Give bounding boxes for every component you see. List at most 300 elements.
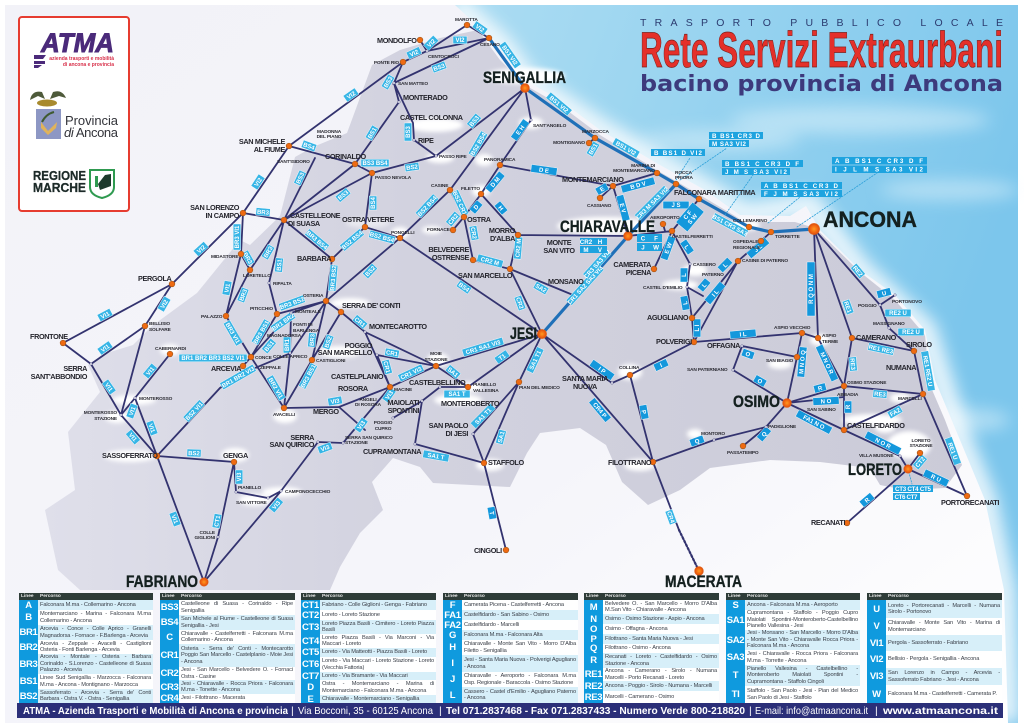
footer bar: | bbox=[291, 705, 294, 717]
town names: IN CAMPO bbox=[206, 211, 240, 220]
route label chips: BS3 BS4 bbox=[362, 161, 388, 167]
small place names: ANGELI bbox=[359, 397, 377, 403]
legend column 5: Osimo - Offagna - Ancona bbox=[605, 626, 668, 632]
town names: RIPE bbox=[418, 136, 434, 145]
route label chips: L bbox=[701, 282, 709, 289]
small place names: AVACELLI bbox=[273, 412, 296, 418]
route label chips: BR1 BR2 bbox=[271, 313, 296, 333]
route label chips: BS2 BS4 bbox=[470, 132, 488, 157]
town names: ROSORA bbox=[338, 384, 369, 393]
logo: Provincia di Ancona bbox=[30, 91, 119, 140]
regular routes bbox=[63, 25, 967, 582]
town names: GENGA bbox=[223, 451, 249, 460]
logo panel bbox=[19, 17, 129, 211]
small place names: CABERNARDI bbox=[155, 346, 187, 352]
legend column 1: Arcevia - Conce - Colle Aprico - Granelli Magnadorsa - Fornace - F.Barlenga - Arcevia bbox=[40, 626, 151, 638]
route label chips: SA1 bbox=[446, 367, 459, 379]
town names: SANT'ABBONDIO bbox=[31, 372, 88, 381]
town names: CASTELLEONE bbox=[290, 211, 341, 220]
box: Marina di Montemarciano: B BS1 CR3 D bbox=[712, 133, 761, 140]
route label chips: CR1 bbox=[381, 361, 390, 375]
route label chips: U bbox=[881, 291, 887, 298]
town names: SAN LORENZO bbox=[190, 203, 240, 212]
route label chips: C F bbox=[683, 210, 694, 221]
small place names: PIANELLO bbox=[473, 382, 497, 388]
legend column 5: Belvedere O. - San Marcello - Morro D'Alba M.San Vito - Chiaravalle - Ancona bbox=[605, 600, 717, 613]
town names: SAN MARCELLO bbox=[318, 348, 373, 357]
route label chips: R Q O N M bbox=[809, 274, 815, 304]
thick trunk routes bbox=[489, 38, 814, 334]
small place names: MADONNA bbox=[317, 129, 342, 135]
box: Ancona: I J L M S SA3 VI2 bbox=[835, 166, 924, 174]
small place names: PALAZZO bbox=[201, 314, 223, 320]
route label chips: VI3 bbox=[320, 445, 331, 453]
small place names: CENTOCROCI bbox=[428, 54, 460, 60]
footer bar: Via Bocconi, 35 - 60125 Ancona bbox=[298, 705, 433, 717]
small place names: MONTEROSSO bbox=[84, 410, 117, 416]
town names: POLVERIGI bbox=[656, 337, 692, 346]
town names: CINGOLI bbox=[474, 546, 502, 555]
route label chips: L bbox=[683, 244, 690, 251]
town names: BARBARA bbox=[297, 254, 332, 263]
overline: TRASPORTO PUBBLICO LOCALE bbox=[640, 17, 1003, 29]
route label chips: VI2 bbox=[474, 24, 485, 34]
legend column 1: B bbox=[25, 612, 32, 623]
town names: SPONTINI bbox=[388, 406, 419, 415]
route label chips: BS1 CR3 SA3 bbox=[711, 214, 749, 238]
small place names: RIPALTA bbox=[273, 281, 292, 287]
legend column 3: Loreto - Via Bramante - Via Maccari bbox=[322, 673, 408, 679]
route label chips: VI3 bbox=[237, 472, 243, 482]
legend column 1 bbox=[19, 593, 153, 703]
small place names: MACINE bbox=[394, 387, 413, 393]
route label chips: BS3 bbox=[406, 126, 412, 138]
route label chips: CR1 bbox=[385, 350, 399, 358]
route label chips: Q bbox=[694, 438, 701, 446]
town names: SAN MICHELE bbox=[239, 137, 286, 146]
small place names: CASSIANO bbox=[587, 203, 612, 209]
legend column 6: Jesi - Chiaravalle - Rocca Priora - Falconara M.ma - Torrette - Ancona bbox=[747, 651, 858, 664]
town names: OSTRENSE bbox=[432, 253, 470, 262]
route label chips: S W bbox=[687, 213, 699, 226]
route label chips: VI1 bbox=[100, 344, 112, 354]
legend column 7: Linee bbox=[869, 594, 882, 599]
small place names: MONTEALE bbox=[295, 309, 322, 315]
route label chips: BS2 VI1 bbox=[185, 401, 205, 422]
legend column 6: TI bbox=[732, 689, 739, 700]
town names: SAN VITO bbox=[543, 246, 575, 255]
route label chips: VI1 bbox=[127, 432, 138, 444]
major town names: OSIMO bbox=[733, 393, 780, 411]
small place names bbox=[84, 17, 933, 541]
town names: RECANATI bbox=[811, 518, 845, 527]
legend column 3: CT3 bbox=[302, 622, 319, 632]
route label chips: D E bbox=[538, 168, 549, 175]
legend column 2: Linee bbox=[162, 594, 175, 599]
logo: ATMA: ATMA bbox=[40, 28, 114, 58]
box: Ancona bbox=[832, 157, 927, 174]
small place names: OSIMO STAZIONE bbox=[847, 380, 887, 386]
legend column 1: Montemarciano - Marina - Falconara M.ma Collemarino - Ancona bbox=[40, 611, 151, 624]
logo: Regione Marche: MARCHE bbox=[33, 180, 86, 195]
route label chips: L bbox=[682, 273, 688, 277]
route label chips: CT2 bbox=[915, 456, 927, 469]
route label chips: BS3 bbox=[337, 189, 351, 202]
route label chips: R U bbox=[930, 474, 941, 484]
footer bar: Tel 071.2837468 - Fax 071.2837433 - Numero Verde 800-218820 bbox=[446, 705, 745, 717]
town names: MERGO bbox=[313, 407, 339, 416]
legend column 1: Falconara M.ma - Collemarino - Ancona bbox=[40, 602, 136, 608]
legend column 5: Osimo - Osimo Stazione - Aspio - Ancona bbox=[605, 616, 705, 622]
legend column 7 bbox=[867, 593, 1002, 703]
small place names: SOLFARE bbox=[149, 327, 172, 333]
route label chips: VI1 bbox=[147, 423, 155, 434]
route label chips: T bbox=[488, 511, 494, 516]
route label chips: E V bbox=[618, 203, 626, 214]
town names: AL FIUME bbox=[254, 145, 285, 154]
route label chips: BS4 bbox=[457, 282, 470, 294]
route label chips: CR1 bbox=[353, 317, 366, 329]
town names: MONTE bbox=[547, 238, 572, 247]
legend column 7: V bbox=[873, 621, 880, 632]
town names: SIROLO bbox=[906, 340, 932, 349]
small place names: CONCE bbox=[255, 355, 273, 361]
small place names: ROCCA bbox=[675, 170, 693, 176]
small place names: DI ROSORA bbox=[355, 402, 382, 408]
legend column 2: BS4 bbox=[161, 617, 178, 628]
route label chips: M N O R bbox=[818, 352, 834, 376]
legend column 4: L bbox=[450, 690, 455, 700]
legend column 2 bbox=[160, 593, 295, 703]
route label chips: BR3 BS2 bbox=[330, 265, 338, 291]
major town names bbox=[126, 69, 917, 591]
town names bbox=[30, 36, 999, 555]
small place names: VALLESINA bbox=[473, 388, 499, 394]
route label chips: O bbox=[756, 378, 763, 386]
small place names: PADIGLIONE bbox=[768, 424, 797, 430]
small place names: PASSO NEVOLA bbox=[375, 175, 412, 181]
route label chips: VI2 bbox=[254, 177, 264, 188]
small place names: ASPIO bbox=[822, 333, 837, 339]
small place names: PONGELLI bbox=[391, 230, 415, 236]
route label chips: L I bbox=[695, 324, 701, 331]
route label chips: CR4 bbox=[665, 511, 675, 525]
town names: DI SUASA bbox=[288, 219, 321, 228]
route label chips: VI1 bbox=[170, 514, 178, 525]
town names: SAN MARCELLO bbox=[458, 271, 513, 280]
legend column 2: Jesi - Filottrano - Macerata bbox=[181, 695, 245, 701]
legend column 5 bbox=[584, 593, 719, 703]
route label chips: BR3 bbox=[310, 333, 317, 346]
route label chips: CR2 bbox=[469, 227, 477, 240]
route label chips: BS4 bbox=[371, 197, 377, 209]
legend column 1: BR1 bbox=[19, 627, 38, 638]
route label chips: RE2 bbox=[851, 265, 864, 279]
logo: ATMA bbox=[34, 28, 114, 68]
route label chips: R bbox=[864, 497, 872, 505]
town names: PICENA bbox=[626, 268, 652, 277]
box: Chiaravalle CR2 H M V: H bbox=[598, 239, 603, 246]
legend column 5: Recanati - Loreto - Castelfidardo - Osimo Stazione - Ancona bbox=[605, 654, 717, 666]
box: Chiaravalle C F J W: F bbox=[654, 236, 658, 242]
route label chips: L bbox=[722, 262, 730, 269]
small place names: TERME bbox=[822, 339, 839, 345]
major town names: CHIARAVALLE bbox=[560, 218, 655, 236]
small place names: FONTI DI bbox=[293, 322, 313, 328]
footer bar: ATMA - Azienda Trasporti e Mobilità di Ancona e provincia bbox=[23, 705, 288, 717]
legend column 4: Cassero - Castel d'Emilio - Agugliano Paterno - Ancona bbox=[464, 688, 576, 701]
box: Falconara: B BS1 C CR3 D F bbox=[725, 161, 799, 168]
legend column 3: Fabriano - Colle Giglioni - Genga - Fabriano bbox=[322, 602, 427, 608]
small place names: SANT'ISIDORO bbox=[277, 159, 310, 165]
route label chips: BR3 BS2 bbox=[279, 297, 306, 311]
logo: ATMA: azienda trasporti e mobilità bbox=[49, 56, 114, 62]
route label chips: BS2 BS4 bbox=[341, 230, 365, 251]
box: Chiaravalle CR2 H M V: M bbox=[583, 247, 589, 254]
small place names: GIGLIONI bbox=[195, 535, 216, 541]
route label chips: VI2 bbox=[427, 38, 438, 49]
town names: CASTEL COLONNA bbox=[400, 113, 464, 122]
route label chips: BR3 bbox=[241, 252, 253, 266]
town names: FALCONARA MARITTIMA bbox=[674, 188, 756, 197]
small place names: REGIONALE bbox=[733, 245, 761, 251]
small place names: STAZIONE bbox=[345, 440, 369, 446]
route label chips: BR1 BR2 BR3 BS2 VI1 bbox=[181, 356, 245, 362]
route label chips: D bbox=[473, 204, 481, 211]
route label chips: BS2 BS4 bbox=[417, 195, 439, 218]
town names: CASTELFIDARDO bbox=[847, 421, 905, 430]
town names: CASTELBELLINO bbox=[409, 378, 466, 387]
route label chips: RE3 bbox=[874, 392, 887, 399]
legend column 7: W bbox=[872, 688, 881, 700]
route label chips: CR2 M bbox=[480, 257, 499, 267]
legend column 2: CR1 bbox=[160, 650, 179, 661]
dotted link to Macerata bbox=[679, 530, 699, 571]
legend column 3: Loreto - Loreto Stazione bbox=[322, 612, 380, 618]
route label chips: I L bbox=[739, 332, 747, 338]
small place names: MONTORO bbox=[701, 431, 725, 437]
legend column 3: Linee bbox=[303, 594, 316, 599]
legend column 5: R bbox=[590, 655, 597, 666]
town names: D'ALBA bbox=[490, 234, 516, 243]
legend column 6: SA3 bbox=[727, 652, 744, 663]
legend column 7: VI2 bbox=[870, 654, 883, 665]
box: Loreto CT: CT6 CT7 bbox=[894, 494, 918, 501]
legend column 4: Percorso bbox=[464, 594, 485, 599]
major town names: LORETO bbox=[848, 461, 902, 479]
small place names: SAN MATTEO bbox=[398, 81, 428, 87]
route label chips: R bbox=[817, 386, 824, 393]
legend column 2: Jesi - San Marcello - Belvedere O. - Fornaci Ostra - Casine bbox=[181, 667, 293, 680]
route label chips: VI1 bbox=[103, 382, 113, 394]
logo: Provincia di Ancona: di Ancona bbox=[64, 125, 119, 140]
route label chips: CR2 bbox=[448, 213, 460, 226]
town names: OSTRA VETERE bbox=[342, 215, 394, 224]
route label chips: VI2 bbox=[346, 91, 358, 101]
footer bar bbox=[17, 703, 1003, 718]
route label chips: VI3 bbox=[272, 500, 283, 511]
route label chips: SA1 T bbox=[427, 453, 445, 462]
legend column 1: BS2 bbox=[20, 690, 37, 702]
box: Ancona: A B BS1 C CR3 D F bbox=[835, 158, 923, 165]
small place names: BELLISIO bbox=[149, 321, 170, 327]
box: Chiaravalle C F J W: J bbox=[641, 244, 645, 252]
subtitle: bacino provincia di Ancona bbox=[640, 72, 1003, 97]
legend column 1: BS1 bbox=[20, 676, 37, 687]
small place names: PITICCHIO bbox=[250, 306, 273, 312]
small place names: CESANO bbox=[480, 42, 500, 48]
legend column 6: Percorso bbox=[747, 594, 768, 599]
route label chips: T1 bbox=[498, 353, 508, 362]
legend column 5: RE3 bbox=[585, 692, 602, 702]
box: Chiaravalle C F J W bbox=[637, 234, 662, 252]
route label chips: CR3 SA3 VI2 bbox=[584, 249, 613, 280]
legend column 6: T bbox=[733, 670, 738, 681]
legend column 7: Pergola - Sassoferrato - Fabriano bbox=[888, 640, 968, 646]
legend column 3: Ostra - Montemarciano - Marina di Montemarciano - Falconara M.ma - Ancona bbox=[322, 681, 434, 694]
small place names: STAZIONE bbox=[425, 357, 448, 363]
legend column 4: Chiaravalle - Monte San Vito - Morro D'Alba Filetto - Senigallia bbox=[464, 641, 576, 654]
legend column 2: Osteria - Serra de' Conti - Montecarotto Poggio San Marcello - Castelplanio - Moie Jesi - Ancona bbox=[181, 646, 293, 665]
legend column 2: Chiaravalle - Castelferretti - Falconara M.ma Collemarino - Ancona bbox=[181, 630, 293, 643]
small place names: MIDASTORE bbox=[211, 254, 239, 260]
major town names: SENIGALLIA bbox=[483, 69, 566, 87]
small place names: PASSATEMPO bbox=[727, 450, 759, 456]
route label chips: BS2 bbox=[365, 265, 378, 278]
small place names: PANORAMICA bbox=[484, 157, 516, 163]
small place names: STAZIONE bbox=[94, 416, 118, 422]
footer bar: | bbox=[749, 705, 752, 717]
town names: ARCEVIA bbox=[211, 364, 242, 373]
legend column 5: Ancona - Camerano - Sirolo - Numana Marcelli - Porto Recanati - Loreto bbox=[605, 668, 717, 680]
town names: MONSANO bbox=[548, 277, 584, 286]
route label chips: E W bbox=[664, 242, 674, 255]
route label chips: VI2 bbox=[409, 49, 420, 59]
town names: MORRO bbox=[489, 226, 516, 235]
route label chips: VI3 bbox=[357, 420, 367, 431]
legend column 7: Chiaravalle - Monte San Vito - Marina di Montemarciano bbox=[888, 620, 1000, 632]
legend column 4: Chiaravalle - Aeroporto - Falconara M.ma Osp. Regionale - Baraccola - Osimo Stazione bbox=[464, 673, 576, 686]
small place names: SAN BIAGIO bbox=[766, 358, 794, 364]
town names: CAMERATA bbox=[613, 260, 652, 269]
route label chips: BS1 bbox=[264, 340, 276, 353]
route label chips: N O bbox=[821, 399, 832, 405]
route label chips: RE1 RE3 bbox=[868, 345, 894, 356]
small place names: SAN SABINO bbox=[807, 407, 836, 413]
small place names: ASPIO VECCHIO bbox=[774, 325, 811, 331]
route label chips: BR3 BS1 bbox=[253, 320, 271, 345]
legend column 6: Ancona - Falconara M.ma - Aeroporto bbox=[747, 602, 838, 608]
small place names: COLLE bbox=[199, 530, 216, 536]
legend column 7: Bellisio - Pergola - Senigallia - Ancona bbox=[888, 656, 979, 662]
legend column 1: Percorso bbox=[40, 594, 61, 599]
title block bbox=[640, 17, 1003, 97]
route label chips: VI3 bbox=[385, 390, 395, 401]
route label chips: R bbox=[846, 404, 852, 409]
small place names: SANT'ANGELO bbox=[533, 123, 567, 129]
town names: SERRA bbox=[63, 364, 88, 373]
small place names: MAROTTA bbox=[455, 17, 478, 23]
legend column 5: Linee bbox=[586, 594, 599, 599]
legend column 7: Percorso bbox=[888, 594, 909, 599]
small place names: MONTIGNANO bbox=[553, 140, 585, 146]
town names: POGGIO bbox=[345, 341, 373, 350]
legend column 3: Loreto Piazza Basili - Via Marconi - Via Maccari - Loreto bbox=[322, 634, 434, 647]
town names: MONDOLFO bbox=[377, 36, 417, 45]
legend column 4: J bbox=[450, 674, 455, 685]
small place names: COLLINA bbox=[619, 365, 640, 371]
route label chips: RE3 bbox=[848, 358, 855, 371]
legend column 2: CR2 bbox=[160, 668, 179, 679]
legend column 2: CR3 bbox=[160, 682, 179, 692]
route label chips: J S bbox=[671, 203, 681, 209]
legend column 1: Linee bbox=[21, 594, 34, 599]
box: Chiaravalle CR2 H M V: V bbox=[598, 247, 603, 254]
legend column 6: Pianello Vallesina - Castelbellino - Monteroberto Maiolati Spontini - Cupramontana - Staffolo Cingoli bbox=[747, 666, 858, 685]
route label chips: VI1 bbox=[146, 366, 157, 377]
box: Falconara: J M S SA3 VI2 bbox=[725, 169, 788, 176]
footer bar: | bbox=[439, 705, 442, 717]
legend column 3: Loreto - Via Maccari - Loreto Stazione - Loreto (Vecchia Fattoria) bbox=[322, 658, 434, 670]
legend column 7: VI1 bbox=[870, 638, 883, 648]
route label chips: N O R bbox=[874, 438, 892, 451]
town names: SAN QUIRICO bbox=[270, 440, 315, 449]
route label chips bbox=[97, 21, 961, 529]
footer bar: | bbox=[875, 705, 878, 717]
small place names: POGGIO bbox=[858, 303, 877, 309]
small place names: PRIORA bbox=[675, 175, 693, 181]
legend column 4: Castelfidardo - San Sabino - Osimo bbox=[464, 612, 549, 618]
small place names: MOIE bbox=[430, 351, 443, 357]
legend column 6: Cupramontana - Staffolo - Poggio Cupro Maiolati Spontini-Monteroberto-Castelbellino Pianello Vallesina - Jesi bbox=[747, 610, 858, 629]
small place names: SAN VITTORE bbox=[236, 500, 268, 506]
route label chips: VI1 bbox=[224, 283, 232, 293]
legend column 4: Jesi - Santa Maria Nuova - Polverigi Agugliano - Ancona bbox=[464, 657, 576, 670]
town names: CORINALDO bbox=[325, 152, 366, 161]
route label chips: I L bbox=[711, 289, 721, 298]
small place names: MARCELLI bbox=[898, 396, 922, 402]
route label chips: VI2 bbox=[455, 38, 465, 44]
route label chips: SA1 bbox=[498, 430, 507, 444]
town names: MONTECAROTTO bbox=[369, 322, 427, 331]
legend column 1: Arcevia - Montale - Osteria - Barbara Corinaldo - S.Lorenzo - Castelleone di Suasa Palazzo - Arcevia bbox=[40, 654, 151, 673]
route label chips: BS3 bbox=[469, 115, 481, 128]
route label chips: BR2 VI1 bbox=[267, 377, 284, 400]
legend column 4: Castelfidardo - Marcelli bbox=[464, 622, 519, 628]
logo: Regione Marche: REGIONE bbox=[33, 168, 86, 183]
town names: SANTA MARIA bbox=[562, 374, 609, 383]
small place names: OSPEDALE bbox=[733, 239, 759, 245]
small place names: CUPRO bbox=[375, 426, 392, 432]
legend column 6: SA2 bbox=[727, 634, 744, 646]
town names: CUPRAMONTANA bbox=[363, 447, 422, 456]
legend column 1: Sassoferrato - Arcevia - Serra de' Conti Barbara - Ostra V. - Ostra - Senigallia bbox=[40, 690, 151, 702]
route label chips: I bbox=[659, 363, 664, 369]
town names: FILOTTRANO bbox=[608, 458, 652, 467]
legend column 4 bbox=[443, 593, 578, 703]
legend column 5: RE1 bbox=[585, 669, 602, 680]
small place names: STAZIONE bbox=[910, 443, 933, 449]
route label chips: BS2 BS4 bbox=[369, 232, 395, 244]
legend column 2: Percorso bbox=[181, 594, 202, 599]
town names: DI JESI bbox=[446, 429, 468, 438]
route label chips: BS3 bbox=[433, 63, 447, 73]
route label chips: E bbox=[599, 186, 606, 194]
town names: MONTERADO bbox=[403, 93, 448, 102]
legend column 2: San Michele al Fiume - Castelleone di Suasa Senigallia - Jesi bbox=[181, 616, 293, 628]
legend column 5: Filottrano - Osimo - Ancona bbox=[605, 645, 671, 651]
route label chips: BS1 VI2 bbox=[548, 95, 569, 115]
